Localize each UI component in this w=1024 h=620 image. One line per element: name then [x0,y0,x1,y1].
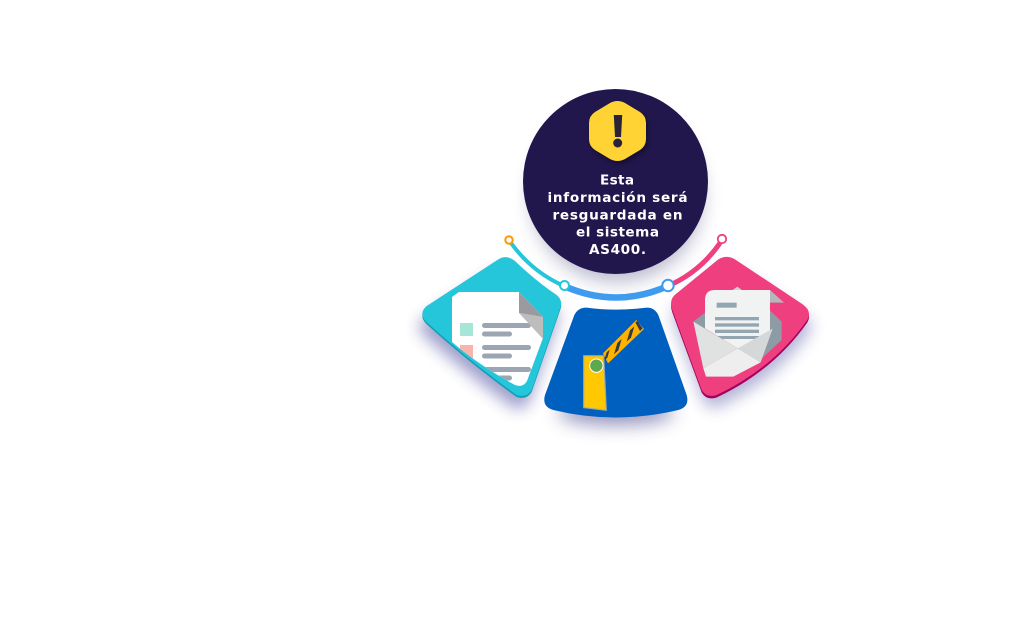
panel: barrier [544,308,687,425]
connecting arc [505,235,726,298]
warning text: Esta [600,172,634,188]
panel: document [419,257,561,409]
warning text: resguardada en [552,208,682,224]
panel: warning circle [523,89,708,274]
panel: envelope [671,257,811,408]
warning text: información será [548,190,688,206]
warning text: AS400. [589,242,646,258]
panel: warning circle shadow [531,110,703,282]
warning text [548,172,688,258]
warning text: el sistema [576,225,659,241]
infographic canvas [412,89,818,438]
icon: warning hexagon [589,101,648,164]
icon: boom barrier [584,320,644,410]
icon: open envelope with letter [693,287,784,377]
icon: document sheet [452,292,543,386]
